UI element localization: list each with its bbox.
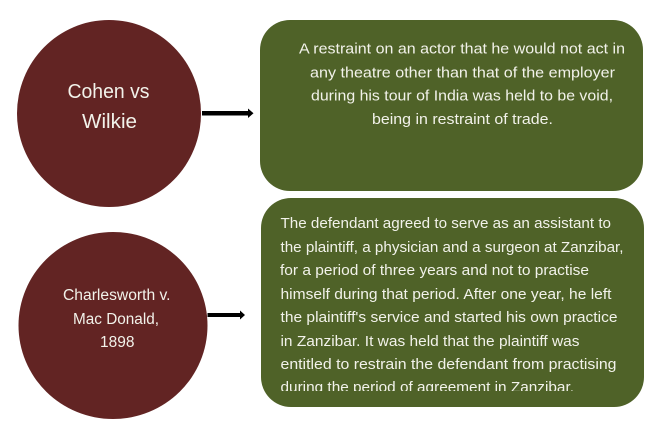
panel: Cohen vs Wilkie summary: any theatre other than that of the employer <box>310 64 615 82</box>
panel: Cohen vs Wilkie summary: being in restraint of trade. <box>372 111 553 128</box>
panel: Charlesworth summary: the plaintiff's service and started his own practice <box>280 309 618 326</box>
circle: Charlesworth v. Mac Donald, 1898: Mac Donald, <box>73 311 159 328</box>
circle: Cohen vs Wilkie: Cohen vs <box>68 80 150 103</box>
panel: Charlesworth summary: entitled to restrain the defendant from practising <box>280 356 616 373</box>
arrow: Charlesworth to summary <box>208 310 245 320</box>
panel: Charlesworth summary: the plaintiff, a physician and a surgeon at Zanzibar, <box>280 239 624 256</box>
circle: Charlesworth v. Mac Donald, 1898: 1898 <box>100 334 134 351</box>
panel: Charlesworth summary: in Zanzibar. It was held that the plaintiff was <box>280 333 580 350</box>
circle: Cohen vs Wilkie <box>17 20 201 207</box>
panel: Cohen vs Wilkie summary: A restraint on an actor that he would not act in <box>299 40 625 58</box>
circle: Charlesworth v. Mac Donald, 1898: Charlesworth v. <box>63 287 170 304</box>
panel: Charlesworth summary: The defendant agreed to serve as an assistant to <box>280 215 611 232</box>
arrow: Cohen vs Wilkie to summary <box>202 108 254 118</box>
circle: Charlesworth v. Mac Donald, 1898 <box>18 232 208 419</box>
panel: Charlesworth summary: during the period of agreement in Zanzibar. <box>280 379 574 396</box>
panel: Cohen vs Wilkie summary <box>260 20 643 191</box>
panel: Cohen vs Wilkie summary: during his tour of India was held to be void, <box>311 88 613 104</box>
panel: Charlesworth summary: himself during that period. After one year, he left <box>280 286 612 303</box>
panel: Charlesworth summary: for a period of three years and not to practise <box>280 262 589 279</box>
panel: Charlesworth summary <box>261 198 644 407</box>
circle: Cohen vs Wilkie: Wilkie <box>82 110 137 133</box>
